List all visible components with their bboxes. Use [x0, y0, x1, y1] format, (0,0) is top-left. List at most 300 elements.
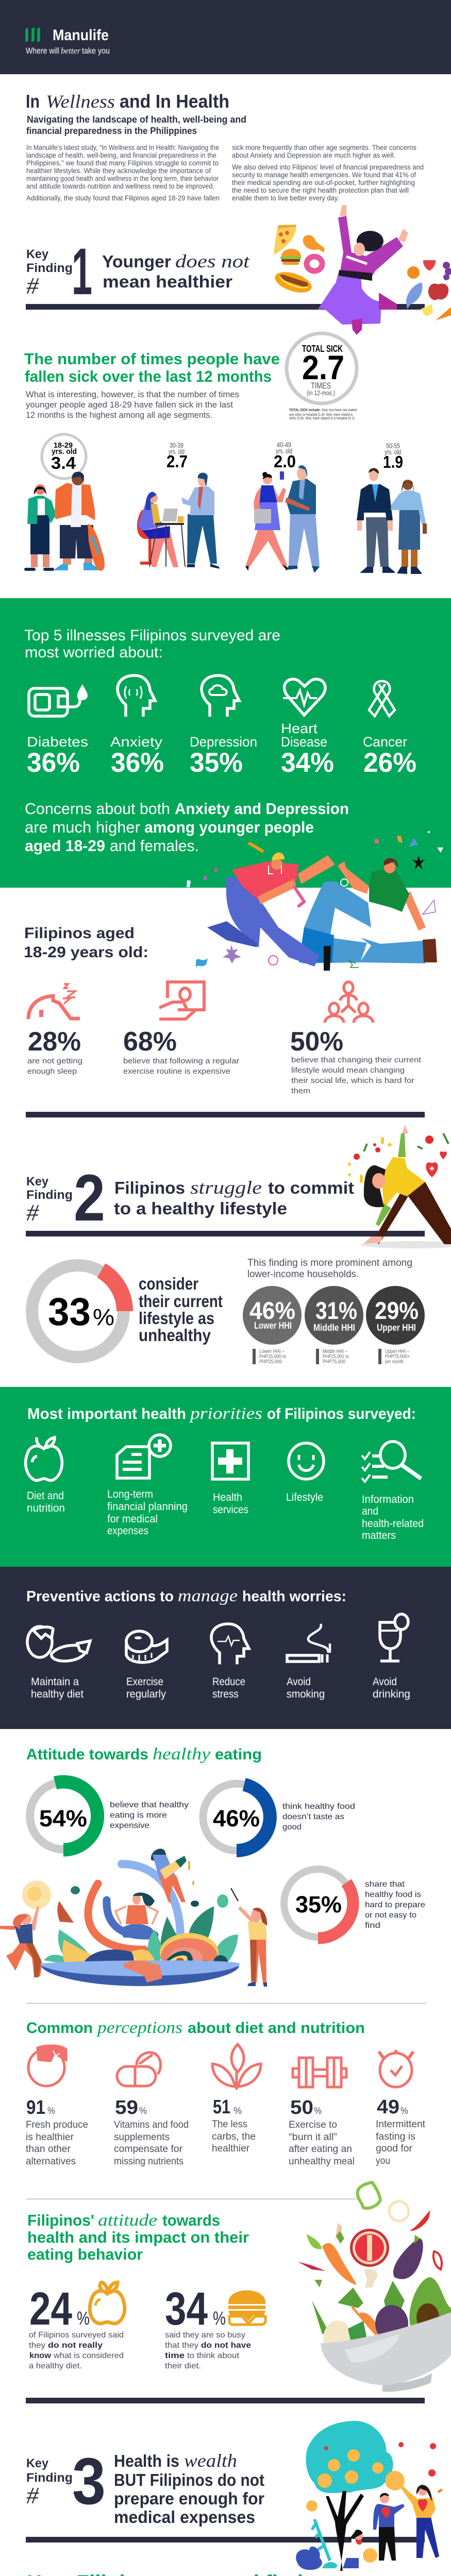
perception: fresh produce: Fresh produce — [26, 2120, 88, 2130]
perception: less carbs: carbs, the — [212, 2131, 256, 2142]
icon: heart with pulse — [283, 679, 325, 715]
perception: less carbs: healthier — [212, 2143, 250, 2154]
perception: intermittent fasting: 49 — [377, 2096, 399, 2118]
subheading: Filipinos aged 18-29 — [24, 925, 148, 961]
perception: exercise: “burn it all” — [289, 2132, 337, 2143]
legend: income brackets: per month — [385, 1359, 404, 1365]
callout: total sick circle: TIMES — [311, 381, 331, 391]
icon: glucose meter — [29, 684, 88, 716]
plants — [312, 2519, 330, 2561]
heading: attitude towards healthy eating — [26, 1745, 262, 1764]
figure: father — [373, 2493, 405, 2561]
stat: 24% do not know healthy diet: know — [29, 2351, 52, 2360]
stat: 24% do not know healthy diet — [29, 2282, 125, 2370]
figure: man in red shirt — [207, 853, 335, 971]
key finding 1 heading: Finding — [26, 261, 73, 275]
stat: heart disease: Disease — [281, 734, 327, 750]
donut: 33% consider lifestyle unhealthy: 33 — [48, 1290, 91, 1334]
intro text right column: their medical spending are out-of-pocket, further highlighting — [232, 179, 415, 187]
labels: expenses — [107, 1525, 148, 1537]
labels: regularly — [126, 1688, 166, 1700]
figure: woman pouring oil — [151, 1849, 194, 1904]
perception: intermittent fasting: Intermittent — [376, 2119, 426, 2130]
stat circle: lower HHI: Lower HHI — [254, 1320, 292, 1331]
arcs — [88, 1884, 144, 1950]
figures: young woman and man with skateboard — [24, 472, 105, 571]
text: 46% label: good — [282, 1823, 302, 1832]
stat: changing lifestyle: 50% — [290, 1027, 343, 1057]
perception: intermittent fasting — [376, 2050, 426, 2166]
callout: total sick circle: (in 12-mos.) — [307, 389, 335, 397]
key finding 3 heading: # — [26, 2482, 39, 2509]
icon: apple — [26, 1437, 62, 1480]
legend: income brackets: PHP75,000+ — [385, 1353, 410, 1360]
stat circle: lower HHI: 46% — [249, 1297, 295, 1324]
text: finding more prominent — [247, 1258, 412, 1280]
labels: matters — [362, 1530, 396, 1541]
age group 18-29: yrs. old — [52, 447, 77, 456]
heading: Preventive actions to — [26, 1588, 174, 1605]
stat: 34% too busy: their diet. — [165, 2362, 201, 2370]
perception: vitamins: compensate for — [114, 2144, 183, 2155]
donut: 54% healthy eating expensive — [30, 1782, 97, 1850]
divider bar — [26, 2398, 425, 2403]
note: total sick definition: clinic (0.8); Sick, have stayed in a hospital (0.1) — [289, 416, 355, 420]
icon: medical box — [212, 1443, 248, 1479]
key finding 2 heading: Key — [26, 1175, 49, 1189]
divider bar — [26, 304, 425, 310]
heading: health worries: — [242, 1588, 346, 1605]
labels: services — [213, 1504, 248, 1516]
perception: intermittent fasting: fasting is — [376, 2131, 415, 2142]
title: In — [26, 91, 40, 112]
intro text left column: Philippines,” we found that many Filipinos struggle to commit to — [26, 159, 219, 167]
illustration: giant plate with women and food — [0, 1849, 267, 1987]
stat: depression: Depression — [190, 734, 257, 750]
intro text left column: and attitude towards nutrition and wellness need to be improved. — [26, 182, 214, 190]
heading: common perceptions: Common — [26, 2020, 93, 2037]
age group 40-49: 2.0 — [274, 452, 296, 471]
text: concerns about anxiety and depression: aged 18-29 — [25, 837, 105, 855]
food — [44, 1886, 238, 1976]
text: concerns about anxiety and depression — [25, 800, 349, 855]
perception: less carbs: The less — [212, 2119, 247, 2130]
perception: fresh produce: alternatives — [26, 2156, 76, 2167]
figure: child — [343, 2530, 363, 2568]
stat: cancer: Cancer — [363, 734, 407, 750]
perception: vitamins: missing nutrients — [114, 2156, 183, 2167]
stat: 34% too busy: that they — [165, 2341, 198, 2350]
stat: exercise is expensive: believe that following a regular — [123, 1057, 239, 1065]
age group 18-29: 18-29 — [54, 441, 73, 450]
stat: 24% do not know healthy diet: do not really — [48, 2341, 103, 2350]
stat: 24% do not know healthy diet: % — [77, 2308, 90, 2329]
stat: 24% do not know healthy diet: of Filipinos surveyed said — [29, 2331, 124, 2340]
legend: income brackets: Upper HHI – — [385, 1348, 409, 1354]
note: total sick definition: TOTAL SICK include: Sick, but have not visited — [289, 408, 357, 412]
intro text right column: sick more frequently than other age segments. Their concerns — [232, 144, 416, 151]
labels: smoking — [287, 1688, 325, 1700]
divider bar — [26, 1112, 425, 1117]
heading: of Filipinos surveyed: — [267, 1405, 416, 1422]
text: finding more prominent: lower-income households. — [247, 1269, 359, 1280]
labels: Health — [213, 1492, 242, 1503]
heading: number of times sick — [24, 350, 280, 385]
icon: stopwatch — [379, 2050, 413, 2087]
perception: fresh produce: than other — [26, 2144, 71, 2155]
legend: income brackets: PHP25,000 — [259, 1359, 282, 1365]
heading: manage — [178, 1587, 238, 1605]
heading: Filipinos' attitude: Filipinos' — [27, 2211, 94, 2229]
heading: common perceptions: perceptions — [96, 2019, 182, 2037]
text: concerns about anxiety and depression: are much higher — [25, 818, 140, 836]
key finding 2 heading: Filipinos — [114, 1178, 185, 1197]
stat: not enough sleep: 28% — [28, 1027, 81, 1057]
age group 18-29 — [24, 434, 105, 571]
labels: drinking — [373, 1688, 410, 1700]
stat circle: lower HHI — [243, 1286, 302, 1345]
icon: head with pulse — [211, 1624, 249, 1664]
intro text right column: the need to secure the right health protection plan that will — [232, 187, 409, 194]
labels: Information — [362, 1494, 414, 1505]
tagline — [26, 46, 110, 56]
icon: cigarette — [287, 1624, 330, 1663]
icon: smile — [289, 1443, 324, 1479]
stat: changing lifestyle: believe that changing their current — [291, 1056, 422, 1064]
stat: 24% do not know healthy diet: a healthy diet. — [29, 2362, 82, 2370]
icon: fish — [406, 282, 423, 309]
text: 46% label: doesn’t taste as — [282, 1812, 344, 1821]
key finding 1 heading: Key — [26, 247, 49, 261]
intro text right column: We also delved into Filipinos’ level of financial preparedness and — [232, 163, 424, 171]
labels: nutrition — [27, 1502, 65, 1514]
figure: jumping woman — [318, 205, 408, 335]
icon: dumbbell — [293, 2058, 346, 2087]
heading: common perceptions: about diet and nutrition — [188, 2020, 365, 2037]
stat: diabetes: Diabetes — [27, 734, 88, 750]
stat: 34% too busy: 34 — [165, 2283, 208, 2335]
perception: fresh produce — [26, 2046, 88, 2167]
heading: attitude towards healthy eating: eating — [215, 1746, 262, 1763]
icon: hot dog — [273, 268, 314, 297]
text: 54% label: eating is more — [110, 1811, 167, 1820]
icon: orange apple — [90, 2282, 125, 2324]
figures: woman with tablet and man with crossed arms — [245, 465, 320, 573]
text: 46% label: think healthy food — [282, 1802, 355, 1811]
labels: Avoid — [373, 1676, 397, 1688]
figure: man in green shirt — [299, 858, 437, 963]
age group 40-49 — [245, 440, 320, 573]
key finding 3 heading: wealth — [184, 2450, 237, 2471]
text: 35% label: hard to prepare — [365, 1901, 425, 1909]
heading — [24, 627, 280, 661]
stat: exercise is expensive: 68% — [123, 1027, 177, 1057]
figures: seated woman and standing man — [137, 472, 220, 569]
stat: heart disease: Heart — [281, 721, 318, 736]
stat: 34% too busy: do not have — [201, 2341, 251, 2350]
icon: anxiety head — [118, 675, 155, 717]
text: consider their current lifestyle as unhealthy: their current — [139, 1292, 223, 1311]
subheading: Filipinos aged 18-29: 18-29 years old: — [24, 944, 148, 961]
icon: apple — [428, 283, 448, 300]
key finding 3 heading: prepare enough for — [114, 2489, 264, 2508]
stat: 34% too busy — [165, 2283, 265, 2370]
heading: number of times sick: fallen sick over the last 12 months — [25, 367, 272, 385]
icon: donut — [307, 257, 322, 271]
key finding 1 heading: mean healthier — [103, 272, 232, 291]
subtitle — [26, 114, 246, 136]
illustration: vegetables falling into bowl — [298, 2182, 451, 2392]
note: total sick definition: any clinic or hospital (1.8); Sick, have visited a — [289, 412, 353, 417]
stat: anxiety — [110, 734, 164, 778]
heading: Filipinos' attitude: towards — [162, 2211, 220, 2229]
icon: ribbon — [369, 681, 395, 716]
icon: pizza — [274, 225, 296, 255]
text: 54% label: expensive — [110, 1821, 149, 1830]
donut: 46% taste — [203, 1784, 270, 1851]
age group 30-39: 30-39 — [170, 441, 183, 449]
callout: total sick circle — [287, 333, 357, 403]
perception: intermittent fasting: good for — [376, 2143, 413, 2154]
labels — [27, 1488, 424, 1541]
stat: exercise is expensive: exercise routine is expensive — [123, 1067, 230, 1076]
icon: sleeping head — [28, 984, 80, 1019]
stat: not enough sleep: are not getting — [27, 1057, 82, 1065]
donut: 33% consider lifestyle unhealthy — [32, 1265, 125, 1357]
stat: depression: 35% — [190, 748, 243, 778]
age group 30-39 — [137, 441, 220, 569]
key finding 3 heading: medical expenses — [114, 2507, 255, 2527]
key finding 1 heading — [26, 235, 250, 309]
stat: diabetes — [27, 734, 88, 778]
figure: woman with pointer — [231, 1888, 267, 1987]
stat circle: upper HHI: 29% — [375, 1297, 419, 1324]
key finding 3 heading: BUT Filipinos do not — [114, 2470, 264, 2489]
key finding 3 heading: Key — [26, 2456, 49, 2470]
heading: Most important health — [27, 1405, 186, 1422]
donut: 54% healthy eating expensive: 54% — [39, 1805, 87, 1832]
labels: healthy diet — [31, 1688, 83, 1700]
legend: income brackets: PHP15,000 to — [259, 1353, 286, 1360]
icon: social group — [325, 982, 373, 1023]
text: 54% label: believe that healthy — [110, 1801, 189, 1809]
key finding 3 heading: Finding — [26, 2471, 73, 2485]
icon: hand holding tablet — [159, 982, 204, 1019]
legend: income brackets — [253, 1348, 410, 1365]
stat: not enough sleep — [27, 984, 82, 1076]
callout: total sick circle: TOTAL SICK — [302, 344, 343, 354]
heading: Filipinos' attitude: health and its impact on their — [27, 2228, 249, 2246]
perception: vitamins — [114, 2053, 189, 2167]
stat: anxiety: Anxiety — [110, 734, 163, 750]
figures: man in suit and woman in skirt — [357, 468, 427, 574]
donut: 46% taste: 46% — [213, 1805, 260, 1832]
heading — [27, 1404, 416, 1423]
perception: vitamins: supplements — [114, 2132, 170, 2143]
icon: tomato and eggplant — [27, 1626, 90, 1661]
perception: vitamins: Vitamins and food — [114, 2120, 189, 2130]
stat circle: middle HHI: 31% — [315, 1297, 357, 1324]
perception: exercise: after eating an — [289, 2144, 352, 2155]
figure: meditating woman — [115, 1892, 158, 1938]
heading: attitude towards healthy eating: Attitude towards — [26, 1746, 148, 1763]
text: 35% label: share that — [365, 1880, 405, 1889]
stat: changing lifestyle — [290, 982, 422, 1095]
stat: anxiety: 36% — [111, 748, 164, 778]
icon: tomato — [28, 2046, 66, 2086]
heading: Filipinos' attitude: eating behavior — [27, 2245, 143, 2263]
labels: Maintain a — [31, 1676, 79, 1688]
perception: exercise: unhealthy meal — [289, 2156, 355, 2167]
tagline: better — [61, 46, 80, 56]
tagline: Where will — [26, 46, 59, 56]
stat: 34% too busy: % — [213, 2308, 226, 2329]
stat: cancer: 26% — [363, 748, 416, 778]
perception: exercise: Exercise to — [289, 2120, 337, 2130]
subtitle: financial preparedness in the Philippines — [26, 126, 197, 136]
text: consider their current lifestyle as unhealthy: lifestyle as — [139, 1309, 214, 1328]
title: Wellness — [46, 91, 115, 112]
labels: Avoid — [287, 1676, 311, 1688]
key finding 2 heading: to commit — [268, 1178, 354, 1197]
stat: changing lifestyle: their social life, which is hard for — [291, 1076, 414, 1085]
intro text left column: landscape of health, well-being, and financial preparedness in the — [26, 151, 216, 159]
text: concerns about anxiety and depression: Anxiety and Depression — [175, 800, 349, 818]
stat: changing lifestyle: them — [291, 1087, 310, 1095]
perception: vitamins: % — [139, 2106, 147, 2116]
age group 50-55: 1.9 — [383, 452, 403, 471]
stat: 34% too busy: time — [165, 2351, 185, 2360]
icon: pills — [117, 2053, 161, 2086]
text: 54% label — [110, 1801, 189, 1830]
key finding 1 heading: # — [26, 273, 39, 299]
labels: Exercise — [126, 1676, 163, 1688]
perception: intermittent fasting: % — [400, 2106, 408, 2116]
callout: total sick circle: 2.7 — [302, 348, 344, 386]
coins — [306, 2449, 405, 2563]
stat: heart disease — [281, 721, 334, 778]
labels: for medical — [107, 1513, 158, 1525]
icon: orange — [407, 266, 420, 279]
tagline: take you — [82, 46, 110, 56]
age group 40-49: 40-49 — [277, 440, 291, 449]
labels: stress — [212, 1688, 239, 1700]
intro text right column: security to manage health emergencies. We found that 41% of — [232, 171, 416, 179]
icon: medical document — [117, 1435, 171, 1478]
decorative shapes — [196, 886, 436, 968]
note: total sick definition — [289, 408, 357, 420]
key finding 2 heading: Finding — [26, 1188, 73, 1202]
key finding 3 heading: Health is — [114, 2451, 179, 2470]
text: concerns about anxiety and depression: Concerns about both — [25, 800, 170, 818]
text: 35% label — [365, 1880, 425, 1930]
legend: income brackets: PHP75,000 — [323, 1359, 345, 1365]
perception: fresh produce: is healthier — [26, 2132, 74, 2143]
divider bar — [26, 1231, 425, 1236]
stat: 24% do not know healthy diet: 24 — [29, 2283, 72, 2335]
figure: woman with sun — [0, 1880, 51, 1977]
labels: Diet and — [27, 1490, 64, 1502]
icons: fruit, hearts and leaves — [348, 1133, 448, 1183]
icon: strawberry — [423, 260, 436, 270]
labels: health-related — [362, 1518, 424, 1530]
divider bar — [26, 2537, 425, 2543]
illustration: money tree and family — [296, 2421, 443, 2571]
legend: income brackets: PHP25,001 to — [323, 1353, 349, 1360]
icon: plant — [212, 2044, 261, 2090]
age group 30-39: yrs. old — [169, 447, 185, 455]
perception: vitamins: 59 — [115, 2097, 138, 2119]
stat: 34% too busy: to think about — [187, 2351, 240, 2360]
key finding 3 heading — [26, 2445, 264, 2527]
labels: Lifestyle — [286, 1492, 323, 1503]
donut: 33% consider lifestyle unhealthy: % — [93, 1304, 114, 1330]
icon: burger — [280, 249, 301, 265]
stat: not enough sleep: enough sleep — [27, 1067, 77, 1076]
title — [26, 91, 229, 112]
key finding 2 heading — [26, 1161, 354, 1235]
text: what is interesting: younger people aged 18-29 have fallen sick in the last — [26, 400, 233, 410]
donut: 35% hard to prepare — [284, 1869, 353, 1938]
perception: exercise: % — [314, 2106, 322, 2116]
labels: and — [362, 1505, 378, 1517]
heading: number of times sick: The number of times people have — [24, 350, 280, 368]
key finding 2 heading: # — [26, 1199, 39, 1226]
text: 35% label: healthy food is — [365, 1890, 421, 1899]
panel: preventive actions (dark) — [0, 1567, 451, 1729]
age group 50-55: 50-55 — [386, 442, 400, 450]
header band with Manulife logo — [0, 0, 451, 74]
stat circle: upper HHI: Upper HHI — [377, 1323, 416, 1333]
perception: fresh produce: % — [47, 2106, 55, 2116]
text: finding more prominent: This finding is more prominent among — [247, 1258, 412, 1268]
perception: less carbs — [212, 2044, 261, 2154]
perception: fresh produce: 91 — [26, 2097, 45, 2119]
illustration: two young people high-fiving — [187, 831, 443, 971]
key finding 1 heading: 1 — [72, 235, 92, 309]
labels — [31, 1676, 410, 1700]
age group 30-39: 2.7 — [166, 452, 188, 471]
perception: less carbs: % — [233, 2106, 242, 2116]
heading: attitude towards healthy eating: healthy — [153, 1745, 210, 1764]
stat: exercise is expensive — [123, 982, 239, 1076]
icon: depression head — [202, 675, 239, 717]
key finding 1 heading: does not — [175, 251, 250, 272]
text: what is interesting: What is interesting, however, is that the number of times — [26, 389, 239, 399]
donut: 35% hard to prepare: 35% — [295, 1891, 342, 1918]
icon: checklist with magnifier — [362, 1442, 421, 1482]
age group 50-55 — [357, 442, 427, 574]
stat: cancer — [363, 734, 416, 778]
text: 35% label: find — [365, 1921, 380, 1930]
intro text left column: maintaining good health and wellness in the long term, their behavior — [26, 175, 219, 182]
key finding 2 heading: struggle — [190, 1177, 262, 1198]
text: concerns about anxiety and depression: and females. — [110, 837, 199, 855]
age group 40-49: yrs. old — [276, 447, 292, 455]
intro text left column: Additionally, the study found that Filipinos aged 18-29 have fallen — [26, 194, 220, 202]
heading: Filipinos' attitude: attitude — [98, 2211, 157, 2230]
stat: 24% do not know healthy diet: what is considered — [53, 2351, 124, 2360]
text: 46% label — [282, 1802, 355, 1832]
text: 35% label: or not easy to — [365, 1911, 416, 1920]
heading: Filipinos' attitude — [27, 2211, 249, 2263]
text: concerns about anxiety and depression: among younger people — [144, 818, 314, 836]
figure: mother — [401, 2485, 439, 2558]
icon: measuring tape — [126, 1631, 167, 1663]
panel: health priorities (green) — [0, 1387, 451, 1567]
title: and In Health — [120, 91, 229, 112]
perception: exercise: 50 — [290, 2097, 313, 2119]
